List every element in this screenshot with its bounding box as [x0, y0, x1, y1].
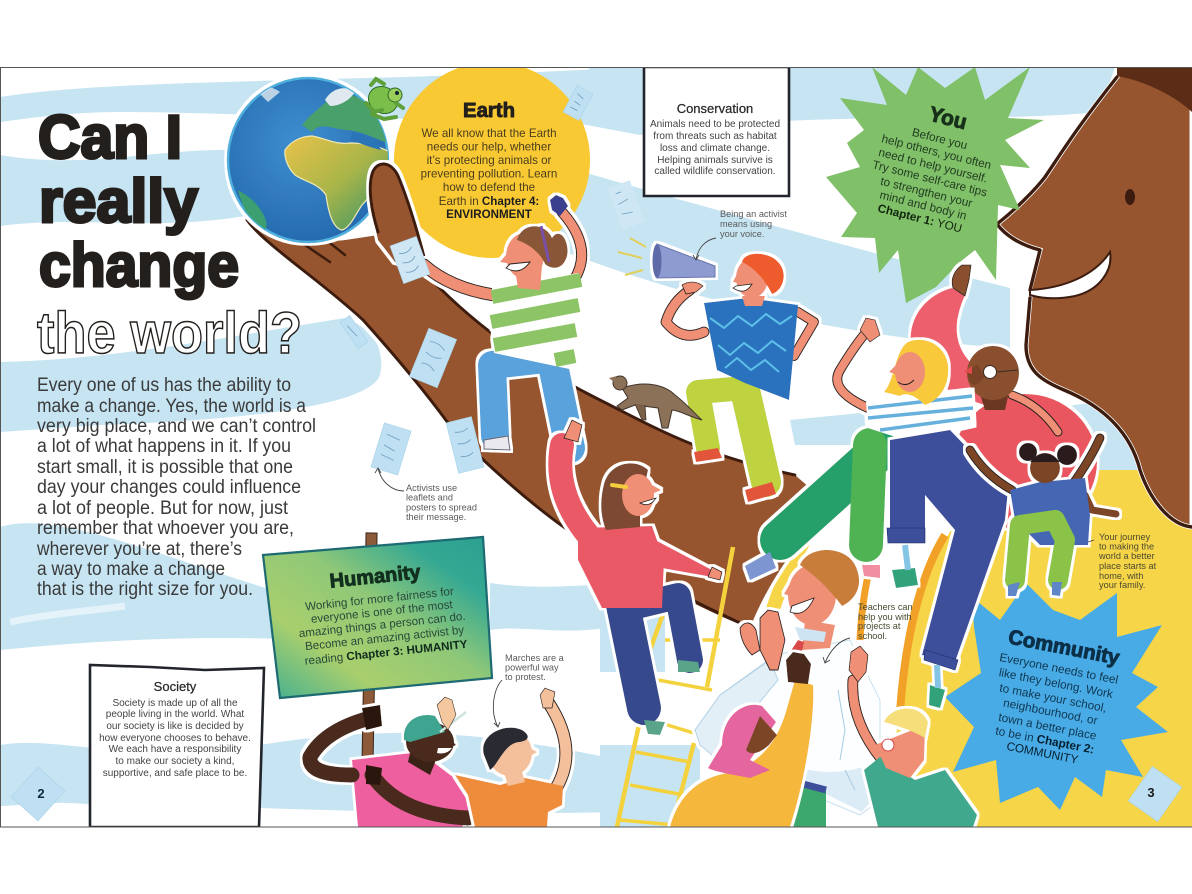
- Community text: to be in Chapter 2:: [994, 724, 1095, 757]
- page number 3 on leaflet: 3: [1147, 785, 1155, 800]
- Humanity text: Humanity: [329, 561, 422, 593]
- annotation: journey note: place starts at: [1099, 561, 1157, 571]
- Community text: town a better place: [997, 710, 1098, 743]
- Community text: Everyone needs to feel: [998, 650, 1119, 687]
- annotation: teachers note: projects at: [858, 621, 901, 631]
- annotation: leaflets note: leaflets and: [406, 492, 453, 502]
- annotation: marches note: to protest.: [505, 672, 546, 682]
- You text: to strengthen your: [879, 175, 974, 210]
- title: Can I: [38, 103, 182, 171]
- Society text: We each have a responsibility: [109, 744, 241, 755]
- annotation: teachers note: Teachers can: [858, 602, 913, 612]
- intro paragraph: a way to make a change: [37, 559, 225, 580]
- annotation: journey note: Your journey: [1099, 532, 1151, 542]
- intro paragraph: make a change. Yes, the world is a: [37, 396, 306, 417]
- You text: You: [927, 103, 969, 134]
- annotation: marches note: [505, 653, 565, 682]
- yellow and orange road edges: [766, 532, 948, 708]
- page number 2 on leaflet: [11, 767, 65, 821]
- You text: Chapter 1: YOU: [876, 202, 963, 235]
- page number 3 on leaflet: [1128, 766, 1182, 822]
- Earth text: We all know that the Earth: [421, 127, 557, 140]
- annotation: leaflets note: their message.: [406, 512, 466, 522]
- person: protester holding sign: [310, 697, 478, 827]
- Community text: neighbourhood, or: [1002, 696, 1099, 728]
- Earth text: how to defend the: [443, 181, 535, 194]
- annotation: marches note: powerful way: [505, 662, 559, 672]
- intro paragraph: Every one of us has the ability to: [37, 375, 291, 396]
- page number 2 on leaflet: 2: [37, 786, 45, 801]
- You text: Try some self-care tips: [871, 158, 989, 199]
- person: woman in red sweater on ladder: [560, 420, 722, 735]
- Humanity text: reading Chapter 3: HUMANITY: [304, 638, 468, 668]
- Earth text: Earth in Chapter 4:: [439, 195, 539, 208]
- annotation: teachers note: [858, 602, 913, 641]
- Community text: Community: [1006, 625, 1122, 670]
- annotation: megaphone note: your voice.: [720, 229, 764, 239]
- Humanity text: Working for more fairness for: [305, 585, 454, 613]
- person: man in red top thumbs up: [911, 265, 1097, 530]
- Society text: Society is made up of all the: [112, 698, 238, 709]
- annotation: journey note: world a better: [1098, 551, 1155, 561]
- annotation: teachers note: school.: [858, 631, 887, 641]
- Earth text: ENVIRONMENT: [446, 208, 532, 221]
- Conservation text: Conservation: [677, 101, 753, 116]
- Community text: to make your school,: [998, 681, 1108, 715]
- person: activist with megaphone: [652, 244, 814, 502]
- panel: Society box: [90, 665, 264, 827]
- Earth text: it’s protecting animals or: [427, 154, 552, 167]
- person: boy with glasses: [849, 646, 977, 827]
- Community text: COMMUNITY: [1005, 739, 1080, 767]
- intro paragraph: wherever you’re at, there’s: [36, 539, 242, 560]
- Conservation text: called wildlife conservation.: [654, 166, 776, 177]
- person: boy in orange top: [455, 688, 566, 827]
- icon: globe: [228, 78, 392, 242]
- You text: need to help yourself.: [877, 146, 989, 186]
- thumb in front of the globe: [370, 164, 428, 272]
- icon: frog: [364, 79, 403, 119]
- intro paragraph: a lot of what happens in it. If you: [37, 436, 291, 457]
- leaflet held by girl: [390, 236, 430, 284]
- intro paragraph: remember that whoever you are,: [37, 518, 294, 539]
- annotation: leaflets note: [406, 483, 477, 522]
- Conservation text: loss and climate change.: [660, 143, 770, 154]
- leaflets scattered: [340, 86, 645, 475]
- annotation: megaphone note: [720, 209, 787, 239]
- annotation: journey note: your family.: [1099, 580, 1145, 590]
- Earth text: [421, 100, 557, 221]
- You text: mind and body in: [878, 188, 968, 223]
- intro paragraph: very big place, and we can’t control: [37, 416, 316, 437]
- person: child with hair puffs: [970, 438, 1116, 596]
- icon: meerkat: [609, 376, 702, 428]
- Community text: like they belong. Work: [998, 665, 1114, 701]
- title: the world?: [37, 301, 302, 366]
- You text: Before you: [911, 126, 969, 152]
- Society text: supportive, and safe place to be.: [103, 768, 247, 779]
- annotation: megaphone note: means using: [720, 219, 772, 229]
- Society text: Society: [154, 679, 197, 694]
- annotation: journey note: to making the: [1099, 542, 1154, 552]
- Society text: our society is like is decided by: [106, 721, 244, 732]
- panel: Conservation box: [644, 67, 789, 196]
- people: protester's sign post: [362, 533, 377, 773]
- Community text: [996, 630, 1120, 764]
- Earth text: Earth: [463, 100, 515, 122]
- icon: sound lines from megaphone: [618, 238, 646, 275]
- yellow hillside: [893, 470, 1192, 827]
- intro paragraph: day your changes could influence: [37, 477, 301, 498]
- person: woman with blonde hair: [745, 318, 974, 580]
- Humanity text: amazing things a person can do.: [298, 610, 466, 640]
- intro paragraph: a lot of people. But for now, just: [37, 498, 289, 519]
- annotation: leaflets note: posters to spread: [406, 502, 477, 512]
- Humanity text: everyone is one of the most: [310, 598, 454, 626]
- title: change: [39, 231, 239, 299]
- Conservation text: from threats such as habitat: [653, 131, 777, 142]
- You text: [874, 106, 990, 232]
- person: woman in pink headscarf: [670, 652, 813, 827]
- Earth text: needs our help, whether: [427, 140, 551, 154]
- Humanity text: Become an amazing activist by: [304, 624, 465, 653]
- person: teacher in white shirt: [695, 550, 880, 827]
- panel: You green starburst: [826, 67, 1044, 303]
- sun: Earth circle: [394, 62, 590, 258]
- annotation: marches note: Marches are a: [505, 653, 565, 663]
- intro paragraph: start small, it is possible that one: [37, 457, 293, 478]
- annotation: arrows: [375, 238, 1094, 727]
- intro paragraph: that is the right size for you.: [37, 579, 253, 600]
- Conservation text: Animals need to be protected: [650, 119, 780, 130]
- Conservation text: [650, 101, 780, 177]
- panel: Community blue starburst: [945, 583, 1168, 810]
- panel: Humanity sign: [263, 537, 492, 698]
- person: girl in striped top: [424, 195, 582, 450]
- intro paragraph: [36, 375, 316, 600]
- annotation: journey note: [1098, 532, 1157, 590]
- annotation: journey note: home, with: [1099, 571, 1143, 581]
- title: really: [39, 167, 198, 235]
- annotation: teachers note: help you with: [858, 612, 912, 622]
- Humanity text: [300, 565, 467, 665]
- person: navy trousers: [887, 430, 1008, 708]
- Society text: how everyone chooses to behave.: [99, 733, 251, 744]
- title: [37, 103, 302, 366]
- You text: help others, you often: [880, 132, 992, 172]
- Conservation text: Helping animals survive is: [657, 155, 773, 166]
- Society text: to make our society a kind,: [116, 756, 234, 767]
- annotation: leaflets note: Activists use: [406, 483, 457, 493]
- Earth text: preventing pollution. Learn: [421, 168, 557, 180]
- annotation: megaphone note: Being an activist: [720, 209, 787, 219]
- Society text: [99, 679, 251, 779]
- ladders: [617, 547, 733, 827]
- big brown face in profile: [997, 67, 1192, 527]
- Society text: people living in the world. What: [106, 709, 244, 720]
- brown arm and hand holding up the globe: [247, 220, 830, 628]
